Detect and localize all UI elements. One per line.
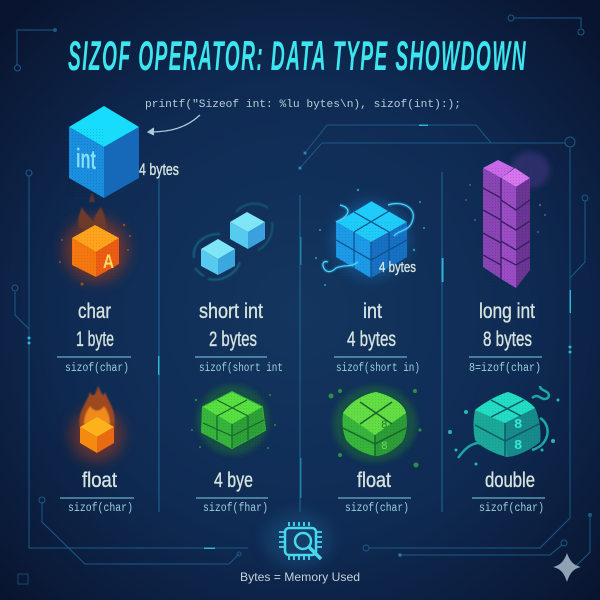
panel: float orange — [60, 386, 134, 515]
size: 4 bye: 4 bye — [214, 469, 253, 492]
code: sizeof fhar: sizof(fhar) — [203, 502, 268, 515]
name: double: double — [485, 469, 535, 492]
panel: short int — [194, 204, 283, 375]
rule — [472, 497, 545, 499]
caption: Bytes = Memory Used — [240, 570, 360, 584]
name: long int: long int — [479, 300, 535, 323]
label: 4 bytes on cube: 4 bytes — [379, 259, 416, 276]
icon: sparkle star — [553, 553, 581, 582]
icon: chip with magnifier — [264, 512, 332, 568]
code: 8=izof char: 8=izof(char) — [469, 362, 541, 375]
size: 1 byte: 1 byte — [76, 328, 114, 351]
code: sizeof short in: sizof(short in) — [336, 362, 420, 375]
panel: char — [57, 192, 131, 375]
panel: 4 bye — [191, 385, 276, 515]
icon: int cube — [69, 106, 139, 198]
rule — [334, 356, 407, 358]
size: 4 bytes: 4 bytes — [347, 328, 396, 351]
name: float: float — [357, 469, 391, 492]
icon: green glitch cube: 8 — [381, 420, 388, 432]
icon: teal cube — [448, 386, 560, 466]
code: sizeof short int: sizof(short int — [199, 362, 283, 375]
icon: two light blue cubes — [194, 204, 272, 280]
accent highlights — [28, 124, 572, 549]
icon: int cube: int — [76, 142, 96, 175]
code: sizeof char: sizof(char) — [68, 502, 133, 515]
code snippet: printf("Sizeof int: %lu bytes\n), sizof(int):); — [145, 99, 461, 111]
rule — [195, 356, 267, 358]
icon: green cube — [191, 385, 276, 455]
name: float: float — [82, 469, 117, 492]
name: int: int — [363, 300, 382, 323]
size: 2 bytes: 2 bytes — [209, 328, 257, 351]
icon: green glitch cube: 8 — [381, 441, 388, 453]
icon: flaming float cube — [71, 386, 123, 461]
arrow: code to cube — [148, 115, 200, 135]
name: short int: short int — [199, 300, 263, 323]
rule — [469, 356, 542, 358]
name: char: char — [78, 300, 111, 323]
panel: long int — [465, 152, 550, 375]
rule — [60, 497, 134, 499]
size: 8 bytes: 8 bytes — [483, 328, 532, 351]
code: sizeof char: sizof(char) — [65, 362, 129, 375]
label: 4 bytes: 4 bytes — [139, 160, 179, 179]
icon: green glitch cube — [328, 386, 422, 468]
panel: int — [315, 189, 425, 375]
rule — [338, 497, 411, 499]
icon: flaming char cube — [59, 192, 131, 286]
code: sizeof char: sizof(char) — [479, 502, 544, 515]
icon: teal cube: 8 — [514, 417, 522, 433]
icon: electric blue cube — [315, 189, 425, 286]
panel: float green — [328, 386, 422, 515]
rule — [196, 497, 268, 499]
code: sizeof char: sizof(char) — [345, 502, 409, 515]
icon: flaming char cube: A — [103, 252, 114, 273]
icon: purple cube stack — [465, 152, 550, 288]
panel: double — [448, 386, 560, 515]
rule — [57, 356, 131, 358]
icon: teal cube: 8 — [514, 438, 522, 454]
